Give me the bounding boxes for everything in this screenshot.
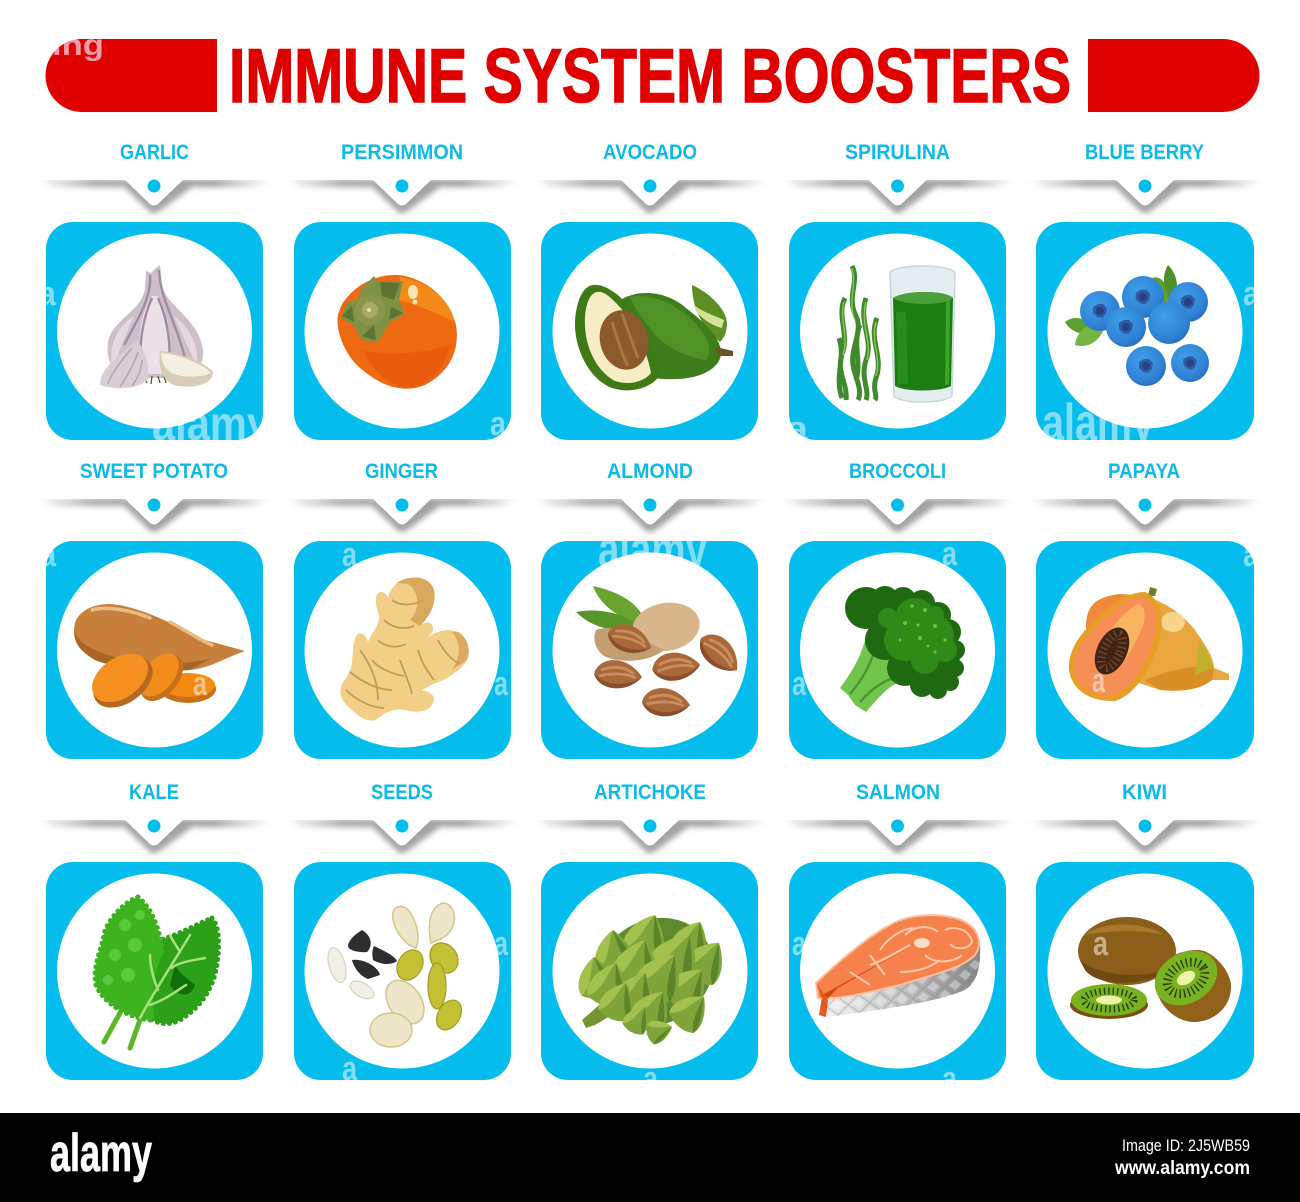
footer bar bbox=[0, 1113, 1300, 1202]
icon: almonds bbox=[576, 586, 747, 716]
panel: seeds: a bbox=[342, 1050, 358, 1088]
panel: papaya: a bbox=[1243, 536, 1260, 574]
label: papaya: PAPAYA bbox=[1108, 460, 1180, 483]
panel: garlic: alamy bbox=[152, 398, 270, 451]
panel: kiwi: a bbox=[1243, 1060, 1260, 1098]
panel: blue berry bbox=[1036, 144, 1254, 440]
icon: papaya: a bbox=[1092, 662, 1106, 700]
panel: artichoke bbox=[541, 784, 760, 1080]
icon: kiwi bbox=[1070, 917, 1231, 1022]
label: artichoke: ARTICHOKE bbox=[594, 781, 706, 804]
panel: blue berry: a bbox=[1243, 275, 1260, 313]
footer logo: alamy bbox=[50, 1124, 152, 1183]
panel: sweet potato bbox=[45, 464, 264, 759]
panel: spirulina: a bbox=[786, 410, 809, 448]
label: garlic: GARLIC bbox=[120, 141, 189, 164]
website: www.alamy.com bbox=[1114, 1158, 1250, 1179]
panel: salmon: a bbox=[792, 925, 807, 963]
icon: ginger bbox=[340, 578, 469, 721]
icon: kale bbox=[95, 897, 219, 1048]
icon: seeds bbox=[325, 903, 467, 1047]
title banner: ing bbox=[52, 29, 104, 62]
icon: persimmon bbox=[337, 275, 457, 389]
label: persimmon: PERSIMMON bbox=[341, 141, 463, 164]
panel: avocado bbox=[525, 141, 775, 440]
icon: sweet potato bbox=[74, 604, 245, 718]
label: kale: KALE bbox=[129, 781, 179, 804]
label: avocado: AVOCADO bbox=[603, 141, 697, 164]
panel: ginger: a bbox=[494, 665, 509, 703]
title: IMMUNE SYSTEM BOOSTERS bbox=[229, 34, 1071, 119]
panel: artichoke: a bbox=[643, 1060, 659, 1098]
panel: kiwi bbox=[1036, 784, 1254, 1080]
label: salmon: SALMON bbox=[856, 781, 940, 804]
label: spirulina: SPIRULINA bbox=[845, 141, 950, 164]
label: broccoli: BROCCOLI bbox=[849, 460, 946, 483]
panel: broccoli: a bbox=[792, 665, 807, 703]
panel: sweet potato: a bbox=[40, 536, 57, 574]
panel: seeds: a bbox=[494, 925, 509, 963]
panel: papaya bbox=[1036, 464, 1254, 759]
panel: ginger bbox=[293, 464, 512, 759]
panel: spirulina bbox=[788, 144, 1007, 440]
panel: kale bbox=[29, 781, 279, 1080]
panel: almond bbox=[541, 464, 760, 759]
panel: salmon: a bbox=[942, 1060, 958, 1098]
panel: almond: alamy bbox=[598, 521, 707, 579]
icon: avocado bbox=[575, 285, 733, 390]
panel: broccoli bbox=[788, 464, 1007, 759]
panel: seeds bbox=[293, 784, 512, 1080]
left red bar bbox=[46, 39, 217, 112]
panel: persimmon bbox=[293, 144, 512, 440]
panel: broccoli: a bbox=[942, 535, 958, 573]
icon: garlic bbox=[100, 265, 213, 388]
label: blue berry: BLUE BERRY bbox=[1085, 141, 1204, 164]
image id: Image ID: 2J5WB59 bbox=[1122, 1136, 1250, 1155]
panel: persimmon: a bbox=[490, 405, 507, 443]
panel: salmon bbox=[788, 784, 1007, 1080]
panel: garlic: a bbox=[38, 275, 57, 313]
label: almond: ALMOND bbox=[607, 460, 693, 483]
panel: ginger: a bbox=[342, 536, 358, 574]
panel: blue berry: alamy bbox=[1042, 394, 1154, 452]
icon: spirulina bbox=[839, 266, 955, 402]
icon: salmon bbox=[816, 915, 980, 1017]
label: sweet potato: SWEET POTATO bbox=[80, 460, 228, 483]
icon: kiwi: a bbox=[1093, 925, 1109, 963]
label: ginger: GINGER bbox=[365, 460, 438, 483]
title banner bbox=[46, 39, 1260, 112]
label: kiwi: KIWI bbox=[1122, 781, 1167, 804]
icon: papaya bbox=[1069, 587, 1229, 701]
icon: artichoke bbox=[575, 897, 734, 1047]
right red bar bbox=[1088, 39, 1259, 112]
icon: blueberries bbox=[1065, 265, 1209, 386]
icon: broccoli bbox=[840, 586, 965, 712]
panel: garlic bbox=[45, 144, 264, 440]
label: seeds: SEEDS bbox=[371, 781, 433, 804]
icon: sweet potato: a bbox=[193, 665, 208, 703]
